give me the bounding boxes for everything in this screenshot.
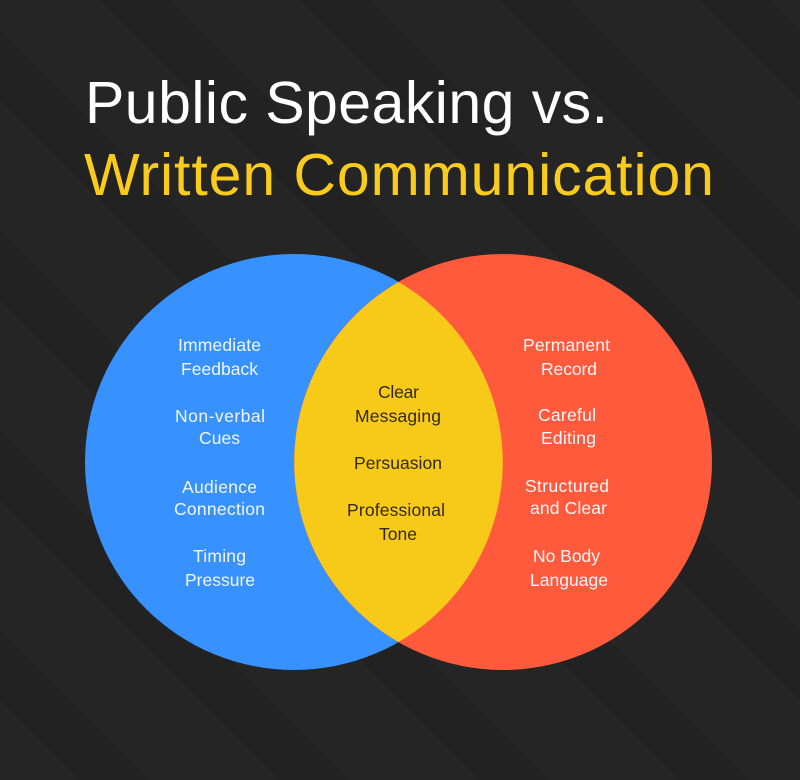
right list: written communication traits [523,335,610,590]
right list: written communication traits: and Clear [530,498,607,518]
right list: written communication traits: Record [541,359,597,379]
center list: shared traits: Clear [378,382,419,402]
overlap: shared traits [294,282,503,642]
circle: written communication [294,254,712,670]
left list: public speaking traits: Cues [199,428,240,448]
venn diagram [85,254,712,670]
left list: public speaking traits: Connection [174,499,265,519]
right list: written communication traits: Careful [538,405,596,425]
left list: public speaking traits [174,335,265,590]
left list: public speaking traits: Audience [182,477,257,497]
center list: shared traits: Tone [379,524,417,544]
left list: public speaking traits: Non-verbal [175,406,265,426]
left list: public speaking traits: Timing [193,546,246,566]
right list: written communication traits: Editing [541,428,596,448]
center list: shared traits: Persuasion [354,453,442,473]
left list: public speaking traits: Feedback [181,359,258,379]
right list: written communication traits: No Body [533,546,600,566]
center list: shared traits [347,382,445,544]
title: Public Speaking vs. [85,70,608,136]
circle: public speaking [85,254,503,670]
left list: public speaking traits: Immediate [178,335,261,355]
right list: written communication traits: Permanent [523,335,610,355]
center list: shared traits: Professional [347,500,445,520]
left list: public speaking traits: Pressure [185,570,255,590]
right list: written communication traits: Structured [525,476,609,496]
center list: shared traits: Messaging [355,406,441,426]
title: Written Communication [84,142,714,208]
title [84,70,714,208]
right list: written communication traits: Language [530,570,608,590]
